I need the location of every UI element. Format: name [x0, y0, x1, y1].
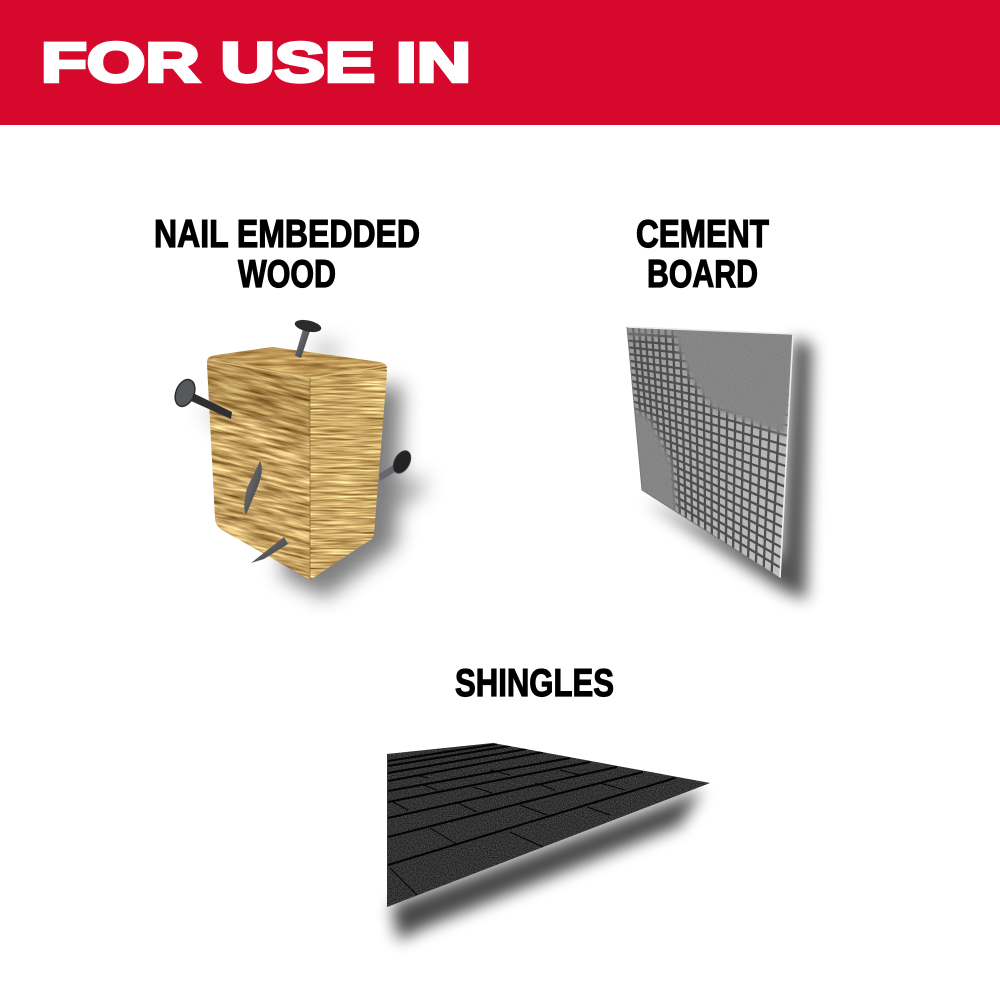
solid cement areas	[628, 328, 792, 513]
heading: nail embedded wood: WOOD	[238, 253, 336, 296]
heading: shingles: SHINGLES	[455, 662, 614, 705]
heading: cement board: CEMENT	[636, 213, 769, 256]
panel: nail embedded wood	[156, 219, 434, 608]
nail: bottom tip	[251, 537, 288, 563]
wood block shadows	[195, 340, 428, 598]
nail: embedded shaft	[244, 461, 262, 515]
shingles shadow	[392, 790, 702, 940]
nail: right	[379, 448, 414, 481]
nail: top	[294, 318, 322, 358]
heading: nail embedded wood	[154, 213, 420, 296]
nail: left	[171, 377, 232, 419]
cement board	[626, 326, 794, 578]
shingle course lines	[388, 744, 675, 895]
red header banner	[0, 0, 1000, 125]
heading: cement board	[636, 213, 769, 296]
heading: cement board: BOARD	[647, 253, 758, 296]
shingled roof	[385, 740, 715, 910]
heading: nail embedded wood: NAIL EMBEDDED	[154, 213, 420, 256]
panel: shingles	[385, 662, 715, 940]
wood block	[207, 347, 387, 580]
panel: cement board	[620, 213, 812, 600]
cement board shadow	[645, 338, 812, 600]
title: FOR USE IN	[41, 30, 471, 94]
mesh grid	[628, 327, 792, 573]
